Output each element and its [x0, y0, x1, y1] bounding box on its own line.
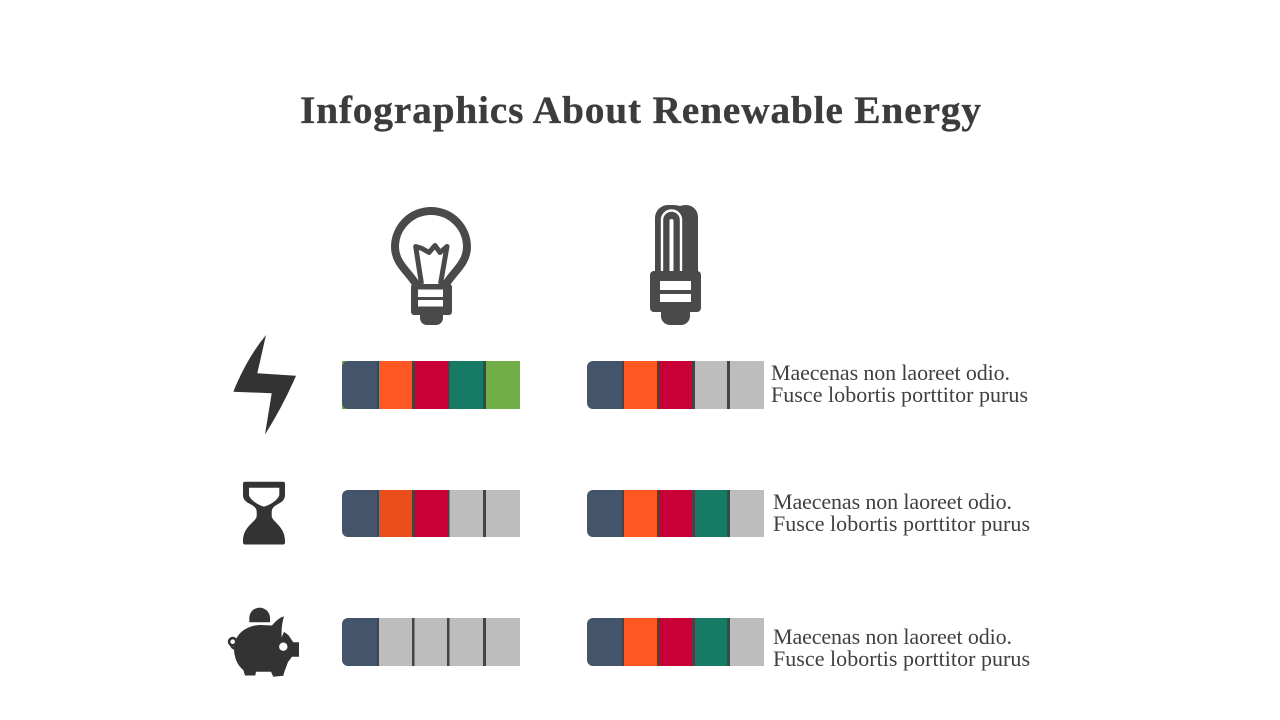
row 1: lightning icon	[233, 335, 296, 434]
row 3: description: Maecenas non laoreet odio.	[773, 624, 1012, 649]
row 2: description	[773, 489, 1030, 536]
row 3: piggy bank icon	[229, 608, 299, 677]
row 2: description: Fusce lobortis porttitor purus	[773, 511, 1030, 536]
row 3: right rating bar	[587, 618, 764, 666]
row 1: description: Maecenas non laoreet odio.	[771, 360, 1010, 385]
title: Infographics About Renewable Energy	[300, 88, 981, 132]
row 3: description: Fusce lobortis porttitor purus	[773, 646, 1030, 671]
row 3: description	[773, 624, 1030, 671]
row 3: left rating bar	[342, 618, 520, 666]
row 2: right rating bar	[587, 490, 764, 537]
row 2: description: Maecenas non laoreet odio.	[773, 489, 1012, 514]
row 1: left rating bar	[342, 361, 520, 409]
row 1: right rating bar	[587, 361, 764, 409]
row 1: description: Fusce lobortis porttitor purus	[771, 382, 1028, 407]
row 2: left rating bar	[342, 490, 520, 537]
row 1: description	[771, 360, 1028, 407]
icon: incandescent light bulb	[395, 211, 467, 325]
icon: compact fluorescent bulb	[650, 205, 701, 325]
row 2: hourglass icon	[243, 482, 285, 544]
